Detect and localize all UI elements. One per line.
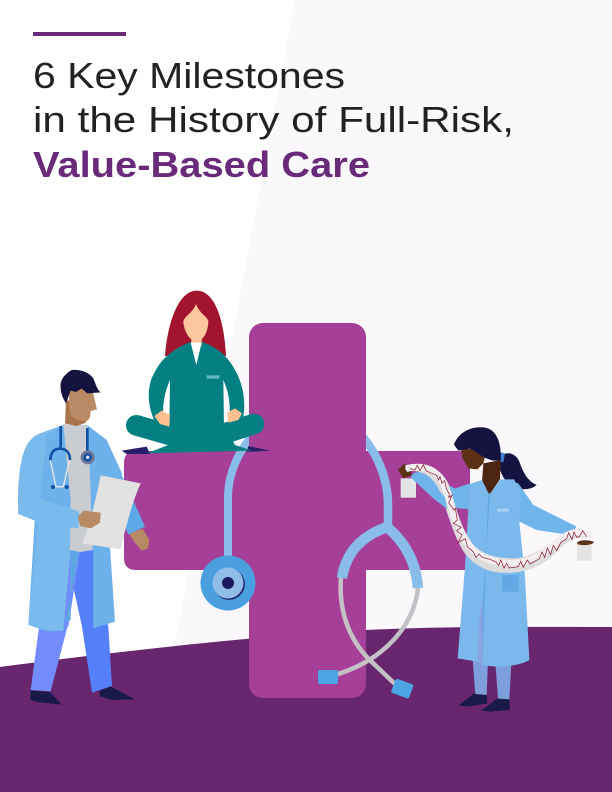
left hand and tag (401, 478, 416, 498)
stethoscope lower parts (200, 527, 418, 699)
doctor with clipboard (18, 370, 149, 705)
face and hair (461, 448, 487, 469)
hand (78, 511, 101, 528)
coat (458, 479, 529, 667)
ECG trace (410, 465, 587, 568)
hair (61, 370, 101, 403)
wearable stethoscope (50, 426, 95, 489)
shoes (30, 686, 135, 705)
title: 6 Key Milestones (33, 55, 345, 96)
coat pocket (502, 575, 519, 592)
neck and head (65, 400, 87, 426)
torso and arms (147, 342, 252, 453)
ear tips (318, 670, 414, 699)
ponytail (499, 453, 537, 489)
shoes (459, 693, 510, 712)
title: in the History of Full-Risk, (33, 99, 514, 140)
neck and face (183, 304, 208, 352)
pocket tag (207, 375, 219, 379)
trousers (473, 660, 511, 699)
cross vertical bar (249, 323, 366, 698)
hair (165, 291, 226, 356)
neck (482, 460, 501, 495)
arms (413, 472, 470, 509)
hands (154, 408, 242, 427)
accent bar (33, 32, 126, 36)
ECG strip (405, 465, 592, 573)
coat sleeve (18, 467, 79, 528)
shoes (122, 446, 270, 454)
upper stethoscope tubes (228, 432, 388, 558)
legs (136, 424, 254, 439)
paper (82, 475, 141, 549)
title: Value-Based Care (33, 144, 370, 185)
trousers (31, 620, 68, 691)
near sleeve (411, 473, 447, 509)
gray tubes (335, 577, 418, 684)
nurse holding ECG strip (398, 427, 594, 712)
ground hill (0, 627, 612, 792)
chest piece (200, 556, 256, 610)
stethoscope fork (342, 527, 418, 588)
right hand and tag (577, 544, 592, 561)
title (33, 55, 514, 185)
meditating nurse (122, 291, 270, 454)
collar (191, 343, 202, 365)
far arm (113, 467, 145, 535)
coat (28, 425, 122, 632)
shirt (63, 424, 93, 552)
cross horizontal bar (124, 451, 470, 570)
